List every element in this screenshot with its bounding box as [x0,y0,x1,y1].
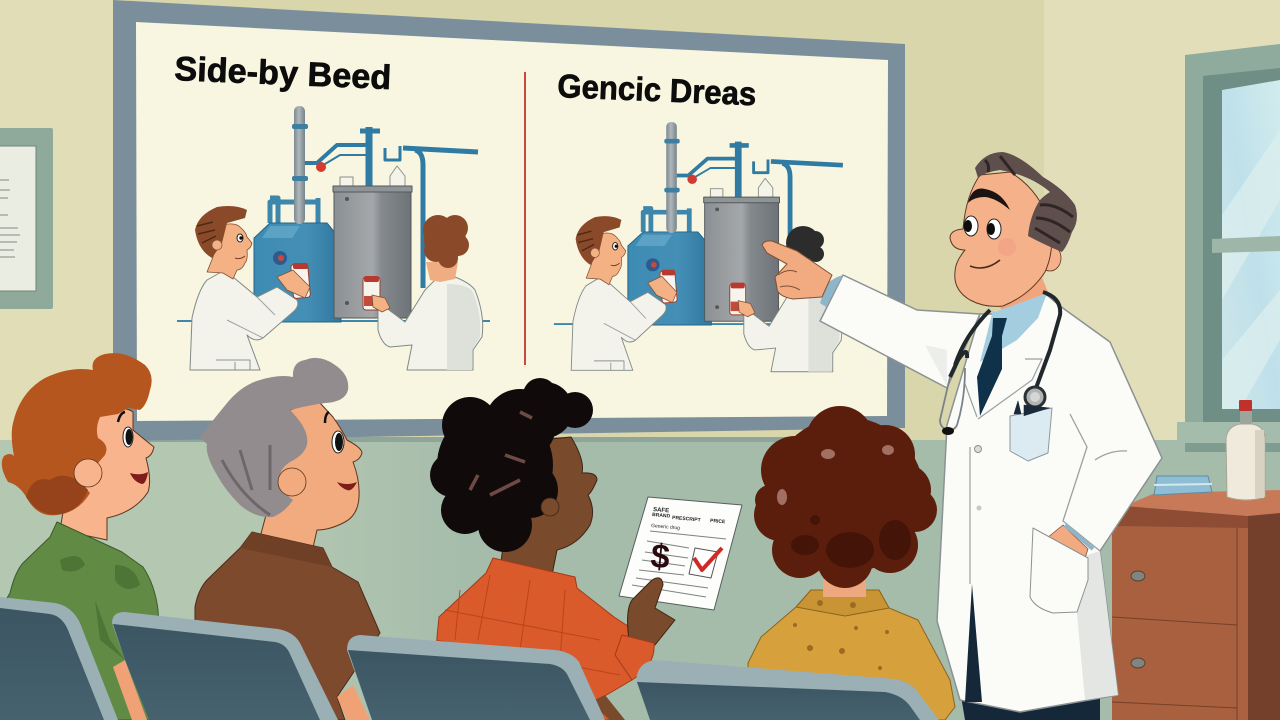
eyes and brow [964,216,978,236]
person: grey hair, brown shirt [195,358,380,720]
white coat body [937,295,1162,712]
chair: front row seat 2 [112,612,338,720]
document text: PRESCRIPT [672,515,701,523]
stack of papers on cabinet [1154,476,1212,495]
collar [980,293,1047,362]
bottle on cabinet [1226,400,1265,500]
head [950,172,1052,306]
document text [651,507,726,532]
doctor [762,152,1162,720]
chair: front row seat 1 [0,597,118,720]
document text: BRAND [652,512,671,520]
icon: dollar sign: $ [649,537,671,577]
chair: front row seat 4 [636,660,939,720]
lower coat pocket [1030,528,1088,613]
ear [1039,245,1061,271]
presentation board [113,0,905,441]
heading: left panel: Side-by Beed [174,50,392,97]
icon: cabinet knobs [1131,571,1145,668]
lapels [965,359,1042,584]
breast pocket [1010,408,1052,461]
document text: Generic drug [651,523,680,532]
document held by person [619,497,742,610]
panel: right equipment and scientists [554,122,854,372]
cabinet [1112,490,1280,720]
framed picture on left wall [0,128,53,309]
document text: PRICE [710,518,726,525]
pointing hand [762,241,832,299]
divider line [524,72,526,365]
chair: front row seat 3 [347,635,605,720]
hand in pocket [1047,525,1088,558]
neck [990,278,1048,316]
right sleeve folds [1063,414,1127,551]
person: orange hair, green shirt [0,353,165,720]
person: brown hair, yellow shirt [748,406,955,720]
raised arm sleeve [820,275,980,388]
person: curly black hair, orange shirt [430,378,654,720]
hand holding document [615,578,675,680]
tie [977,318,1007,416]
trousers [955,660,1100,720]
document text: SAFE [653,507,669,514]
panel: left equipment and scientists [177,106,490,370]
stethoscope [940,292,1060,435]
shirt cuff [820,275,843,307]
icon: checkbox with tick [689,548,722,578]
window [1177,44,1280,452]
hair [975,152,1077,252]
coat buttons [974,446,982,452]
heading: right panel: Gencic Dreas [557,67,757,112]
